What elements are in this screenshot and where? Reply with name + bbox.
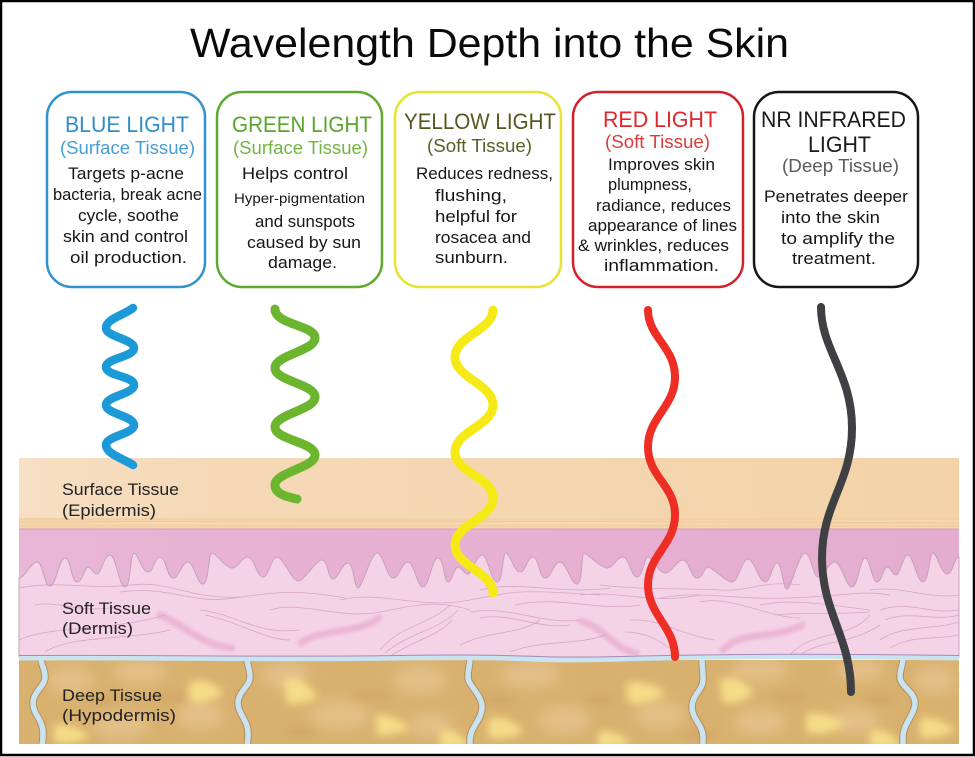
red body text: & wrinkles, reduces	[578, 237, 729, 255]
basement membrane band	[19, 654, 959, 660]
panel: green light	[217, 92, 382, 287]
yellow body text	[416, 165, 553, 267]
label: soft tissue: Soft Tissue	[62, 600, 151, 618]
label: surface tissue	[62, 481, 179, 520]
panel: blue light	[47, 92, 205, 287]
label: surface tissue: (Epidermis)	[62, 502, 156, 520]
infrared body text	[764, 188, 909, 268]
septa	[33, 658, 915, 747]
yellow body text: helpful for	[435, 208, 518, 226]
infrared body text: to amplify the	[781, 230, 895, 248]
infrared body text: Penetrates deeper	[764, 188, 909, 206]
yellow body text: flushing,	[435, 187, 507, 205]
wave: red light	[648, 310, 675, 657]
label: deep tissue	[62, 687, 176, 725]
panel: yellow light	[395, 92, 561, 287]
wave: green light	[275, 309, 315, 499]
panel: near infrared light	[754, 92, 918, 287]
layer labels	[62, 481, 179, 725]
wave: blue light	[106, 308, 134, 465]
infrared body text: into the skin	[781, 209, 880, 227]
green heading: GREEN LIGHT	[232, 112, 372, 137]
blue body text: oil production.	[70, 249, 187, 267]
layer: epidermis	[19, 458, 959, 529]
wave: yellow light	[455, 310, 493, 593]
yellow body text: Reduces redness,	[416, 165, 553, 183]
title: Wavelength Depth into the Skin	[190, 20, 789, 66]
layer: dermis	[19, 529, 959, 657]
green body text: Helps control	[242, 165, 348, 183]
collagen bundles	[160, 615, 802, 653]
red body text: radiance, reduces	[596, 197, 731, 215]
collagen fibres	[19, 584, 959, 655]
red body text: plumpness,	[608, 176, 692, 194]
infrared heading	[761, 107, 906, 157]
label: deep tissue: (Hypodermis)	[62, 707, 176, 725]
red subheading: (Soft Tissue)	[605, 131, 710, 152]
red body text	[578, 156, 737, 275]
green body text	[234, 165, 365, 272]
blue body text: Targets p-acne	[68, 165, 184, 183]
green subheading: (Surface Tissue)	[233, 137, 368, 158]
panel: red light	[573, 92, 743, 287]
infrared heading: LIGHT	[808, 132, 871, 157]
blue heading: BLUE LIGHT	[65, 112, 189, 137]
yellow body text: rosacea and	[435, 229, 531, 247]
yellow body text: sunburn.	[435, 249, 508, 267]
blue body text: bacteria, break acne	[53, 186, 202, 204]
skin cross-section	[19, 458, 959, 750]
label: deep tissue: Deep Tissue	[62, 687, 162, 705]
blue body text	[53, 165, 202, 267]
label: soft tissue: (Dermis)	[62, 620, 133, 638]
red body text: appearance of lines	[588, 217, 737, 235]
infrared heading: NR INFRARED	[761, 107, 906, 132]
infrared body text: treatment.	[792, 250, 876, 268]
green body text: caused by sun	[247, 234, 361, 252]
blue body text: cycle, soothe	[78, 207, 179, 225]
layer: hypodermis	[19, 658, 959, 750]
infrared subheading: (Deep Tissue)	[782, 155, 899, 176]
red body text: inflammation.	[604, 257, 719, 275]
label: soft tissue	[62, 600, 151, 638]
red heading: RED LIGHT	[603, 107, 717, 132]
green body text: damage.	[268, 254, 337, 272]
yellow subheading: (Soft Tissue)	[427, 135, 532, 156]
blue body text: skin and control	[63, 228, 188, 246]
blue subheading: (Surface Tissue)	[60, 137, 195, 158]
green body text: Hyper-pigmentation	[234, 190, 365, 206]
yellow heading: YELLOW LIGHT	[404, 109, 556, 134]
green body text: and sunspots	[255, 213, 355, 231]
wave: near infrared light	[821, 307, 852, 692]
red body text: Improves skin	[608, 156, 715, 174]
label: surface tissue: Surface Tissue	[62, 481, 179, 499]
